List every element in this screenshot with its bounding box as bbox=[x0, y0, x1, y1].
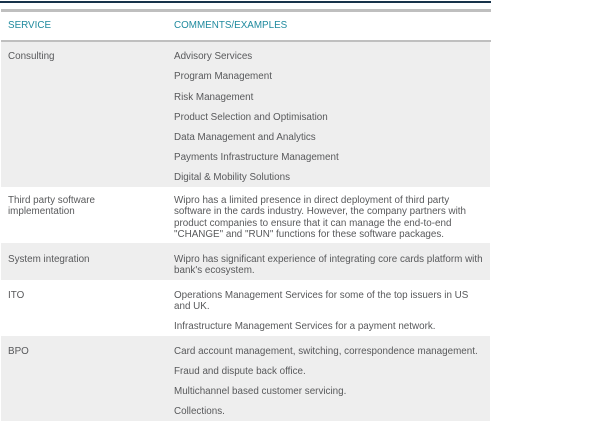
consulting examples: Payments Infrastructure Management bbox=[174, 152, 339, 162]
label: system integration: System integration bbox=[8, 254, 90, 264]
label: third party software implementation bbox=[8, 194, 95, 217]
third party comment: "CHANGE" and "RUN" functions for these software packages. bbox=[174, 229, 444, 240]
BPO examples: Fraud and dispute back office. bbox=[174, 366, 306, 376]
ITO comment: Infrastructure Management Services for a payment network. bbox=[174, 320, 436, 332]
header band rule bbox=[1, 9, 491, 12]
label: third party software implementation: Third party software bbox=[8, 194, 95, 206]
header: comments/examples: COMMENTS/EXAMPLES bbox=[174, 20, 287, 30]
header: service: SERVICE bbox=[8, 20, 51, 30]
header bottom rule bbox=[1, 40, 491, 42]
row: system integration bbox=[1, 243, 490, 280]
system integration comment bbox=[174, 254, 483, 276]
third party comment bbox=[174, 194, 466, 240]
label: ITO: ITO bbox=[8, 290, 24, 300]
consulting examples: Digital & Mobility Solutions bbox=[174, 172, 290, 182]
consulting examples bbox=[174, 50, 339, 182]
consulting examples: Program Management bbox=[174, 70, 272, 82]
consulting examples: Advisory Services bbox=[174, 50, 252, 62]
BPO examples: Card account management, switching, correspondence management. bbox=[174, 346, 478, 356]
BPO examples: Multichannel based customer servicing. bbox=[174, 386, 346, 396]
ITO comment bbox=[174, 290, 468, 332]
row: consulting bbox=[1, 42, 490, 187]
consulting examples: Risk Management bbox=[174, 92, 253, 102]
third party comment: product companies to ensure that it can manage the end-to-end bbox=[174, 218, 451, 228]
label: consulting: Consulting bbox=[8, 50, 55, 62]
row: BPO bbox=[1, 336, 490, 421]
ITO comment: and UK. bbox=[174, 301, 210, 312]
consulting examples: Data Management and Analytics bbox=[174, 132, 316, 142]
third party comment: Wipro has a limited presence in direct deployment of third party bbox=[174, 194, 449, 206]
label: third party software implementation: implementation bbox=[8, 206, 75, 217]
ITO comment: Operations Management Services for some of the top issuers in US bbox=[174, 290, 468, 300]
label: BPO: BPO bbox=[8, 346, 29, 356]
BPO examples bbox=[174, 346, 478, 416]
consulting examples: Product Selection and Optimisation bbox=[174, 112, 328, 122]
top navy rule bbox=[0, 1, 491, 3]
system integration comment: bank's ecosystem. bbox=[174, 265, 255, 276]
system integration comment: Wipro has significant experience of integrating core cards platform with bbox=[174, 254, 483, 264]
BPO examples: Collections. bbox=[174, 406, 225, 416]
third party comment: software in the cards industry. However, the company partners with bbox=[174, 206, 466, 217]
